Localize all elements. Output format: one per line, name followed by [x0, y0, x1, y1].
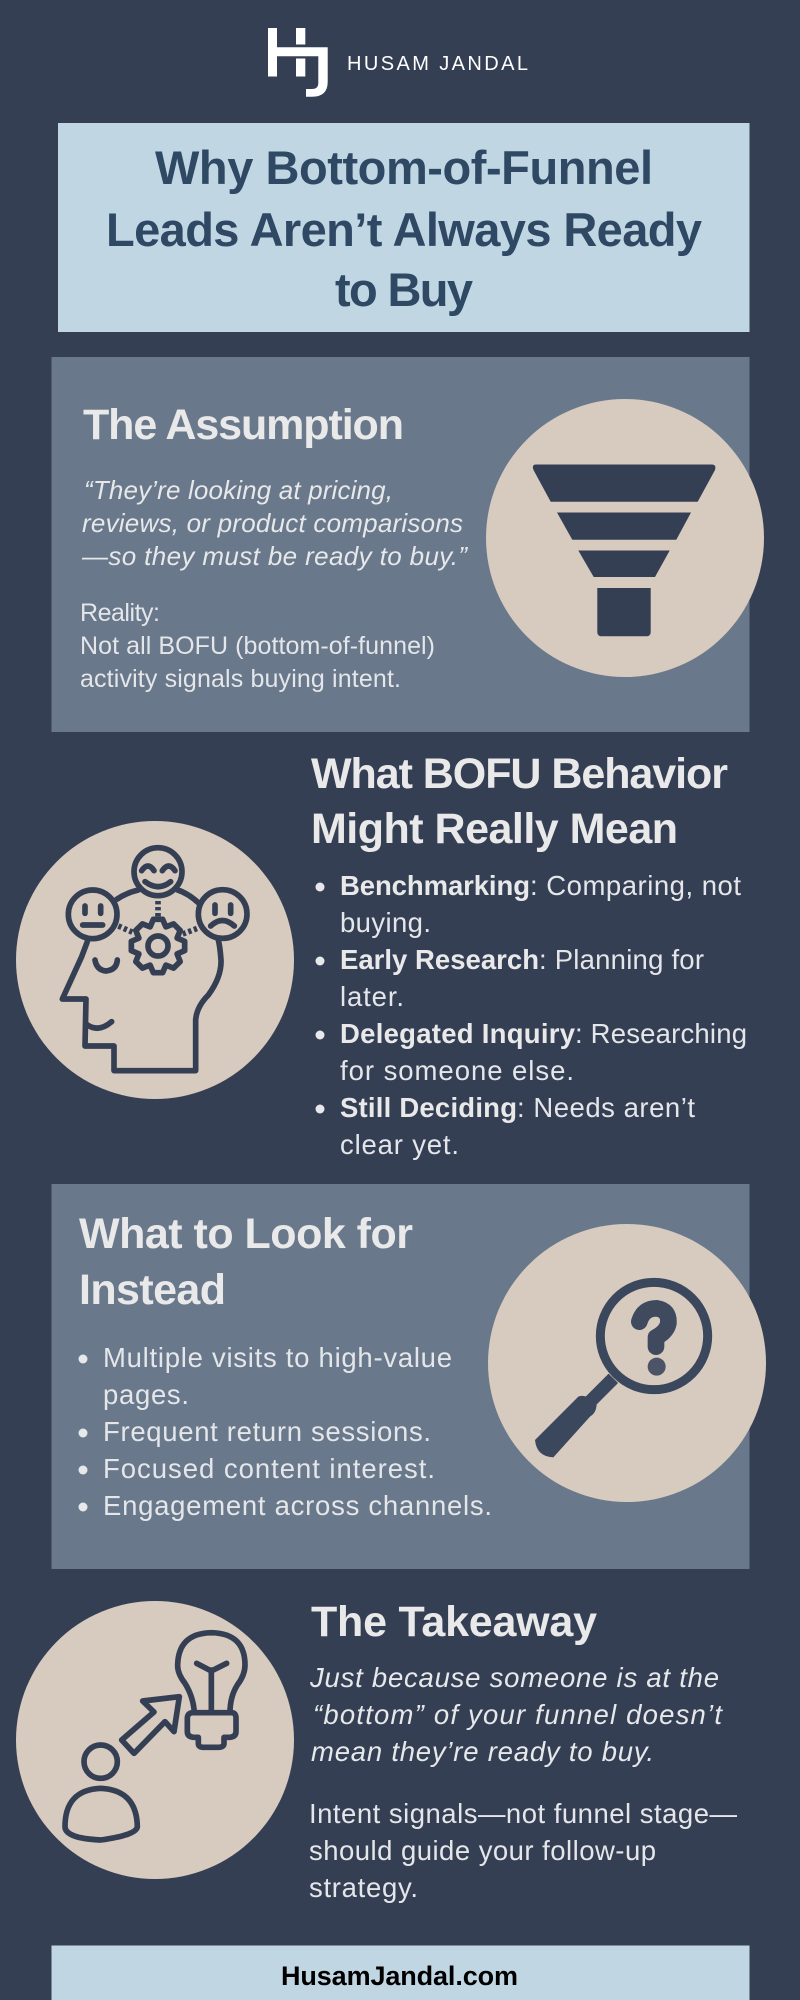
- bullet: still deciding: Still Deciding: [340, 1092, 517, 1123]
- footer url: HusamJandal.com: [281, 1961, 518, 1991]
- heading: the takeaway: The Takeaway: [311, 1598, 597, 1646]
- list: signals: Engagement across channels.: [103, 1490, 492, 1521]
- bullet: delegated inquiry: for someone else.: [340, 1055, 574, 1086]
- list: signals: Focused content interest.: [103, 1453, 435, 1484]
- panel: title: [58, 123, 750, 332]
- bullet: benchmarking: : Comparing, not: [530, 870, 741, 901]
- bullet: early research: [316, 944, 704, 1012]
- panel: what to look for instead: [52, 1184, 766, 1569]
- bullet: benchmarking: Benchmarking: [340, 870, 530, 901]
- heading: BOFU behavior: [311, 750, 728, 853]
- section: the takeaway: [309, 1598, 738, 1903]
- heading: what to look for instead: Instead: [79, 1266, 226, 1314]
- panel: footer website: [52, 1946, 750, 2000]
- icon: magnifying glass with question mark: [488, 1224, 766, 1502]
- bullet: delegated inquiry: Delegated Inquiry: [340, 1018, 576, 1049]
- text: intent signals: Intent signals—not funnel stage—: [309, 1798, 738, 1829]
- bullet: early research: later.: [340, 981, 404, 1012]
- text: reality: Not all BOFU (bottom-of-funnel): [80, 632, 435, 660]
- heading: what to look for instead: [79, 1210, 413, 1314]
- list: signals: Multiple visits to high-value: [103, 1342, 452, 1373]
- bullet: still deciding: : Needs aren’t: [517, 1092, 695, 1123]
- section: what BOFU behavior might really mean: [311, 750, 747, 1160]
- icon: HJ monogram: [268, 28, 328, 97]
- quote: assumption: reviews, or product comparisons: [82, 508, 463, 538]
- bullet: delegated inquiry: : Researching: [575, 1018, 747, 1049]
- text: reality: activity signals buying intent.: [80, 665, 401, 693]
- quote: takeaway: “bottom” of your funnel doesn’t: [313, 1699, 723, 1730]
- bullet: benchmarking: [316, 870, 741, 938]
- quote: assumption: —so they must be ready to buy.”: [81, 541, 468, 571]
- quote: assumption: “They’re looking at pricing,: [84, 475, 393, 505]
- text: reality: [80, 599, 435, 693]
- text: intent signals: strategy.: [309, 1872, 418, 1903]
- heading: what to look for instead: What to Look for: [79, 1210, 413, 1258]
- icon: person, arrow and light bulb: [16, 1601, 294, 1879]
- bullet: early research: : Planning for: [539, 944, 704, 975]
- icon: funnel: [486, 399, 764, 677]
- title: Leads Aren’t Always Ready: [106, 203, 702, 256]
- heading: the assumption: The Assumption: [83, 401, 404, 449]
- quote: assumption: [81, 475, 468, 571]
- panel: the assumption: [52, 357, 764, 732]
- quote: takeaway: mean they’re ready to buy.: [311, 1736, 654, 1767]
- bullet: delegated inquiry: [316, 1018, 747, 1086]
- heading: BOFU behavior: What BOFU Behavior: [311, 750, 728, 798]
- logo wordmark: HUSAM JANDAL: [347, 53, 528, 75]
- text: intent signals: [309, 1798, 738, 1903]
- quote: takeaway: [309, 1662, 723, 1767]
- bullet: still deciding: clear yet.: [340, 1129, 459, 1160]
- heading: BOFU behavior: Might Really Mean: [311, 805, 678, 853]
- title: [106, 141, 702, 316]
- bullet: benchmarking: buying.: [340, 907, 431, 938]
- bullet: still deciding: [316, 1092, 695, 1160]
- text: reality: Reality:: [80, 599, 160, 627]
- bullet: early research: Early Research: [340, 944, 539, 975]
- list: signals: [78, 1342, 492, 1521]
- title: to Buy: [335, 263, 473, 316]
- logo: Husam Jandal: [268, 28, 528, 97]
- list: signals: pages.: [103, 1379, 189, 1410]
- text: intent signals: should guide your follow-up: [309, 1835, 656, 1866]
- title: Why Bottom-of-Funnel: [155, 141, 653, 194]
- icon: head with faces and gear: [16, 821, 294, 1099]
- quote: takeaway: Just because someone is at the: [309, 1662, 719, 1693]
- list: signals: Frequent return sessions.: [103, 1416, 431, 1447]
